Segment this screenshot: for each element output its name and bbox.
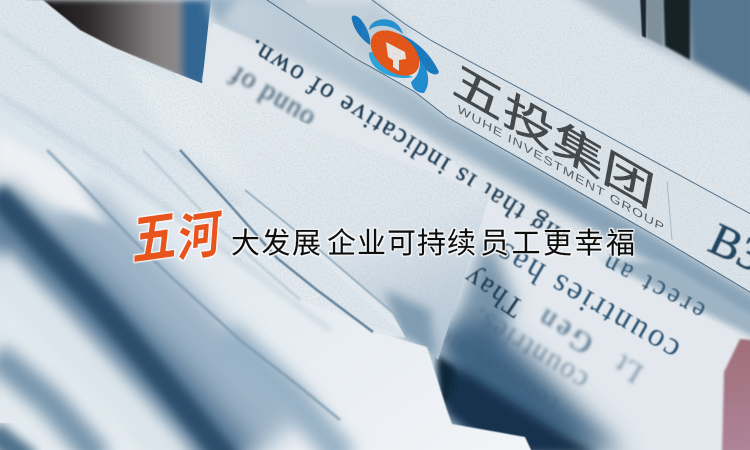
slogan text: [231, 227, 635, 260]
corner stripe: [0, 432, 30, 450]
lower right newspaper sheet: [432, 213, 750, 450]
newspaper text: Lt: Lt: [608, 348, 649, 390]
band surface left dim: [267, 0, 410, 70]
broad blue band: [0, 205, 240, 450]
dark background top: [30, 0, 230, 100]
fold soft highlight: [120, 60, 250, 190]
orange disc: [362, 21, 428, 85]
upper page with logo band: [202, 0, 750, 345]
top right blue-grey: [688, 0, 750, 96]
blue left arm: [352, 16, 370, 45]
dark stripe: [0, 193, 232, 450]
newspaper text: second line: ound of: [224, 59, 320, 135]
newspaper text: indicative: ing that is indicative of own.: [243, 33, 572, 253]
deckle edge 3: [245, 190, 407, 338]
top right pale strip: [645, 0, 663, 46]
slogan part 2: 企业可持续: [327, 227, 476, 260]
blue right arm: [396, 33, 439, 75]
deckle edge 2: [180, 150, 373, 332]
paper grain: [0, 0, 750, 349]
newspaper text: Thay: Thay: [459, 261, 529, 323]
newspaper text: countries blurred: countries.: [466, 301, 594, 398]
河: 河: [176, 206, 223, 269]
light strip: [0, 262, 175, 450]
top right soft shadow: [565, 0, 750, 100]
logo icon: [352, 16, 439, 93]
deckle edge 1: [47, 150, 340, 420]
dim left area above band: [205, 0, 420, 70]
band surface: [300, 0, 750, 298]
newspaper text: countries: countries has: [490, 235, 686, 368]
top right dark slot: [663, 0, 690, 60]
sheet shading right: [600, 260, 750, 340]
slogan logo 五河: [132, 204, 223, 272]
slogan text: 大发展: [231, 227, 321, 260]
shaded paper: [445, 235, 515, 365]
faint lines: [0, 30, 240, 205]
newspaper text: erect an: erect an: [597, 248, 710, 327]
main centre page: [173, 72, 490, 360]
shadow under band: [222, 0, 750, 330]
white arrow: [386, 42, 406, 71]
deckle edge 4 faint: [143, 150, 300, 300]
mid blue stripe: [0, 355, 100, 450]
page shadow near tip: [385, 290, 436, 358]
newspaper text: me: countries me: [432, 323, 563, 420]
band upper line: [372, 0, 750, 219]
slogan part 3: 员工更幸福: [480, 227, 635, 260]
dark shadow under pages: [438, 355, 600, 450]
company name: 五投集团: [449, 56, 658, 217]
band lower line: [267, 0, 750, 298]
newspaper text: Gen: Gen: [532, 302, 599, 361]
blue bottom right blob: [411, 62, 428, 93]
english company name: WUHE INVESTMENT GROUP: [457, 102, 665, 234]
slogan logo 五河: 五: [132, 204, 178, 272]
blue bottom crescent: [369, 52, 413, 78]
red object: [722, 339, 750, 450]
top left sheets: [0, 0, 407, 338]
top of stripes bright: [0, 130, 110, 225]
blue top crescent: [369, 19, 403, 34]
text sheet behind pages: [202, 0, 750, 450]
lower right band: [225, 335, 345, 450]
mid paper tone: [70, 205, 285, 430]
left page stack: [0, 0, 532, 450]
